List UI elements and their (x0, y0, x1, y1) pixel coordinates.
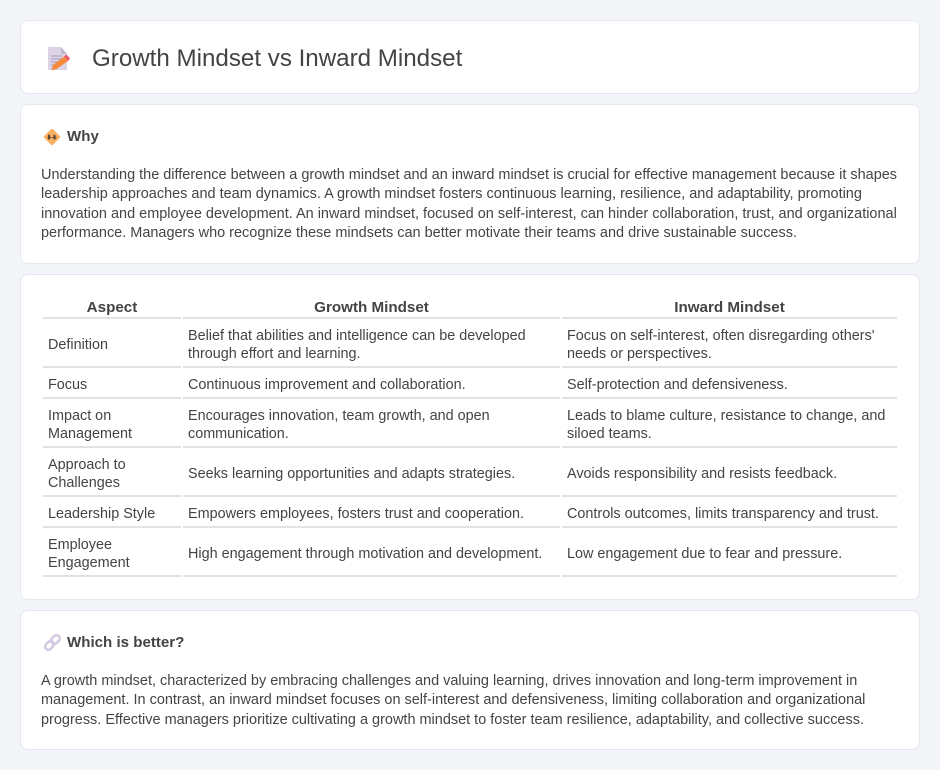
row: employee engagement: Engagement (48, 555, 130, 571)
row: impact on management: Management (48, 426, 132, 442)
which is better text block: management. In contrast, an inward mindset focuses on self-interest and defensiveness, limiting collaboration and organizational (41, 692, 865, 708)
row: approach to challenges (48, 457, 126, 491)
table header: Aspect (87, 299, 137, 316)
row: approach to challenges: Challenges (48, 475, 120, 491)
why text block: innovation and employee development. An inward mindset, focused on self-interest, can hinder collaboration, trust, and organizational (41, 206, 897, 222)
icon: chain link (44, 634, 61, 651)
comparison table: Focus on self-interest, often disregarding others' (567, 328, 875, 344)
heading: why: Why (67, 128, 99, 145)
row: employee engagement: Employee (48, 537, 112, 553)
which is better text block: A growth mindset, characterized by embracing challenges and valuing learning, drives innovation and long-term improvement in (41, 672, 857, 688)
panel: comparison table (20, 274, 920, 600)
why text block: leadership approaches and team dynamics. A growth mindset fosters continuous learning, resilience, and adaptability, promoting (41, 186, 862, 202)
comparison table: Leads to blame culture, resistance to change, and (567, 408, 885, 424)
title: Growth Mindset vs Inward Mindset (92, 45, 462, 72)
comparison table: communication. (188, 426, 289, 442)
row: definition: Definition (48, 337, 108, 353)
which is better text block: progress. Effective managers prioritize cultivating a growth mindset to foster team resilience, adaptability, and collective success. (41, 712, 864, 728)
icon: warning diamond (44, 128, 60, 146)
comparison table: Avoids responsibility and resists feedback. (567, 466, 837, 482)
which is better text block (41, 672, 865, 728)
row: impact on management (48, 408, 132, 442)
comparison table: Continuous improvement and collaboration. (188, 377, 466, 393)
comparison table: High engagement through motivation and development. (188, 546, 542, 562)
comparison table: Low engagement due to fear and pressure. (567, 546, 842, 562)
why text block: Understanding the difference between a growth mindset and an inward mindset is crucial for effective management because it shapes (41, 166, 897, 182)
comparison table: Controls outcomes, limits transparency and trust. (567, 506, 879, 522)
comparison table: Encourages innovation, team growth, and open (188, 408, 490, 424)
icon: document with pencil (48, 47, 70, 70)
row: focus: Focus (48, 377, 87, 393)
comparison table: Seeks learning opportunities and adapts strategies. (188, 466, 515, 482)
row: employee engagement (48, 537, 130, 571)
comparison table (43, 299, 897, 577)
row: impact on management: Impact on (48, 408, 111, 424)
panel: why (20, 104, 920, 264)
heading: which is better: Which is better? (67, 634, 184, 651)
comparison table: Belief that abilities and intelligence can be developed (188, 328, 526, 344)
header card (20, 20, 920, 94)
comparison table: through effort and learning. (188, 346, 361, 362)
comparison table: Empowers employees, fosters trust and cooperation. (188, 506, 524, 522)
row: approach to challenges: Approach to (48, 457, 126, 473)
panel: which is better (20, 610, 920, 750)
comparison table: needs or perspectives. (567, 346, 712, 362)
comparison table: Growth Mindset (314, 299, 429, 316)
row: leadership style: Leadership Style (48, 506, 155, 522)
why text block: performance. Managers who recognize these mindsets can better motivate their teams and drive sustainable success. (41, 225, 797, 241)
comparison table: Inward Mindset (674, 299, 785, 316)
why text block (41, 166, 897, 241)
comparison table: Self-protection and defensiveness. (567, 377, 788, 393)
comparison table: siloed teams. (567, 426, 652, 442)
